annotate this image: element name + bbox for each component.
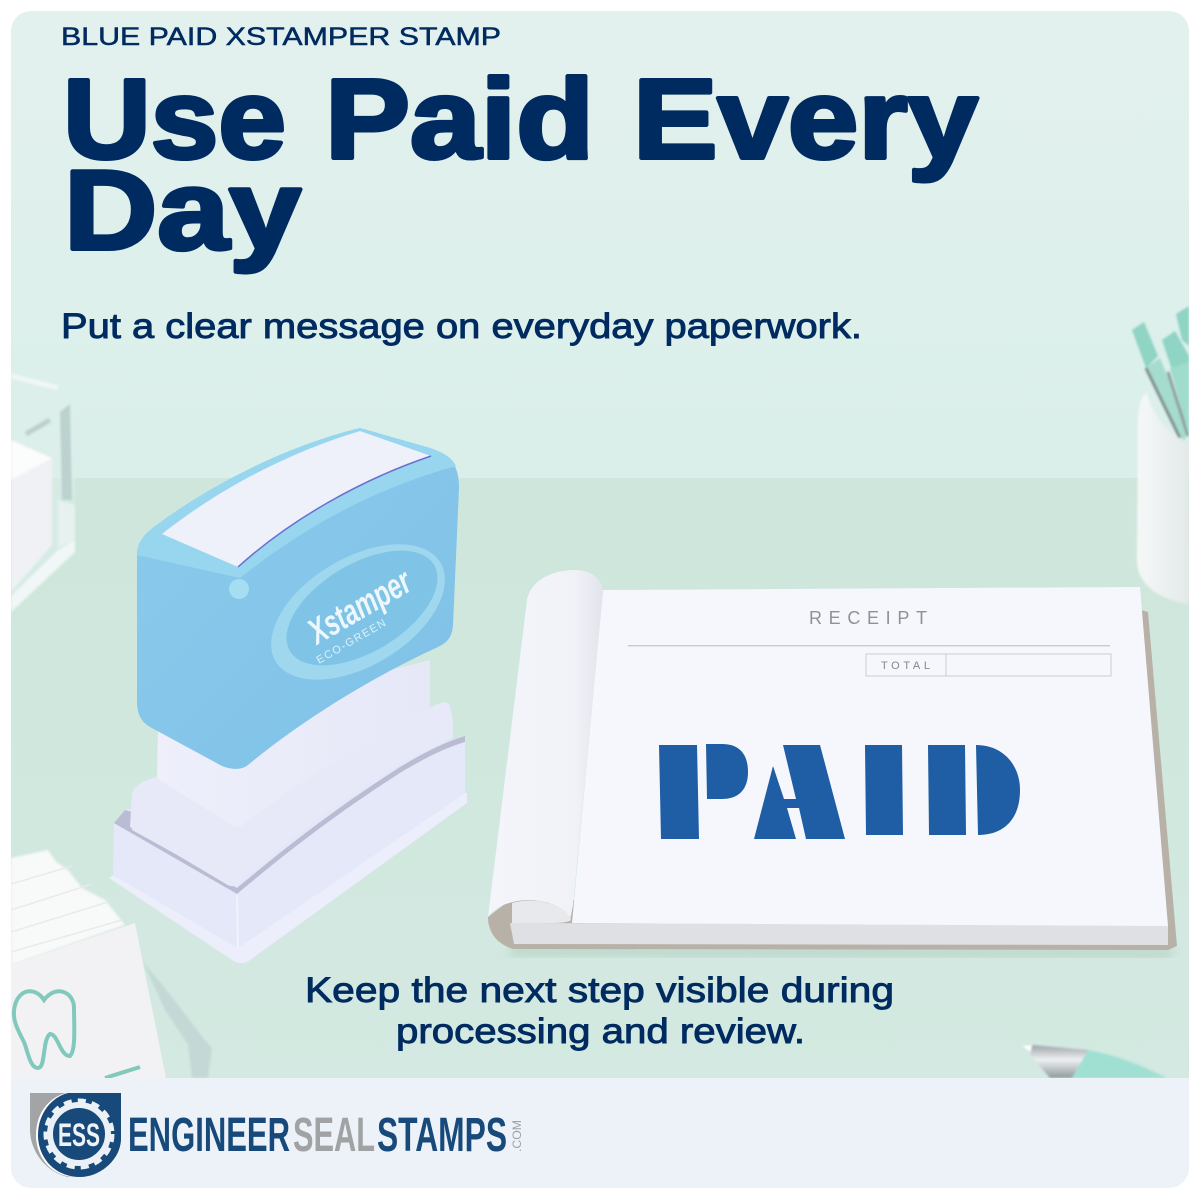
notebook page bbox=[572, 587, 1168, 926]
stamp top rim bbox=[137, 428, 456, 578]
stamp corner highlight bbox=[229, 579, 249, 599]
PAID imprint bbox=[659, 744, 1020, 839]
eco green: ECO-GREEN bbox=[314, 617, 388, 667]
title: Every bbox=[633, 56, 978, 182]
pen bbox=[1022, 1045, 1167, 1078]
receipt label: RECEIPT bbox=[809, 608, 927, 628]
logo wordmark bbox=[130, 1118, 506, 1152]
stamp neck bbox=[157, 660, 430, 777]
business cards bbox=[11, 850, 212, 1078]
title: Day bbox=[64, 147, 301, 273]
logo .com: .COM bbox=[510, 1120, 524, 1152]
bottom caption: Keep the next step visible during bbox=[305, 971, 894, 1010]
eyebrow label: BLUE PAID XSTAMPER STAMP bbox=[61, 23, 501, 51]
title: Use bbox=[63, 56, 286, 182]
glass tray with paper bbox=[11, 375, 75, 612]
title: Paid bbox=[325, 56, 594, 182]
subtitle: Put a clear message on everyday paperwork. bbox=[61, 307, 862, 346]
title bbox=[63, 56, 978, 273]
brand name: Xstamper bbox=[299, 560, 419, 653]
logo mark bbox=[30, 1093, 121, 1177]
icon: tooth bbox=[14, 991, 74, 1068]
stamp mid block bbox=[130, 702, 453, 886]
stamp blue body bbox=[137, 428, 459, 769]
total box: TOTAL bbox=[881, 660, 930, 672]
logo wordmark: SEAL bbox=[293, 1109, 375, 1162]
page curl bbox=[512, 901, 571, 923]
stamp top label bbox=[162, 431, 431, 567]
bottom caption: processing and review. bbox=[396, 1012, 805, 1051]
stamp tray bbox=[109, 736, 467, 963]
notebook page edges bbox=[510, 923, 1168, 945]
pen cup bbox=[1132, 306, 1189, 604]
shadow under notebook bbox=[510, 948, 1176, 957]
logo mark: ESS bbox=[58, 1117, 100, 1153]
total box bbox=[866, 654, 1111, 676]
glass block bbox=[143, 962, 212, 1078]
footer bar bbox=[11, 1078, 1189, 1190]
logo wordmark: STAMPS bbox=[377, 1109, 507, 1162]
bottom caption bbox=[305, 971, 894, 1051]
notebook cover bbox=[488, 610, 1177, 950]
receipt notebook bbox=[488, 570, 1177, 950]
cup body bbox=[1137, 392, 1189, 604]
rolled page bbox=[488, 570, 603, 920]
stamp bbox=[109, 428, 468, 963]
logo wordmark: ENGINEER bbox=[128, 1109, 290, 1162]
stamp oval logo bbox=[271, 544, 445, 680]
